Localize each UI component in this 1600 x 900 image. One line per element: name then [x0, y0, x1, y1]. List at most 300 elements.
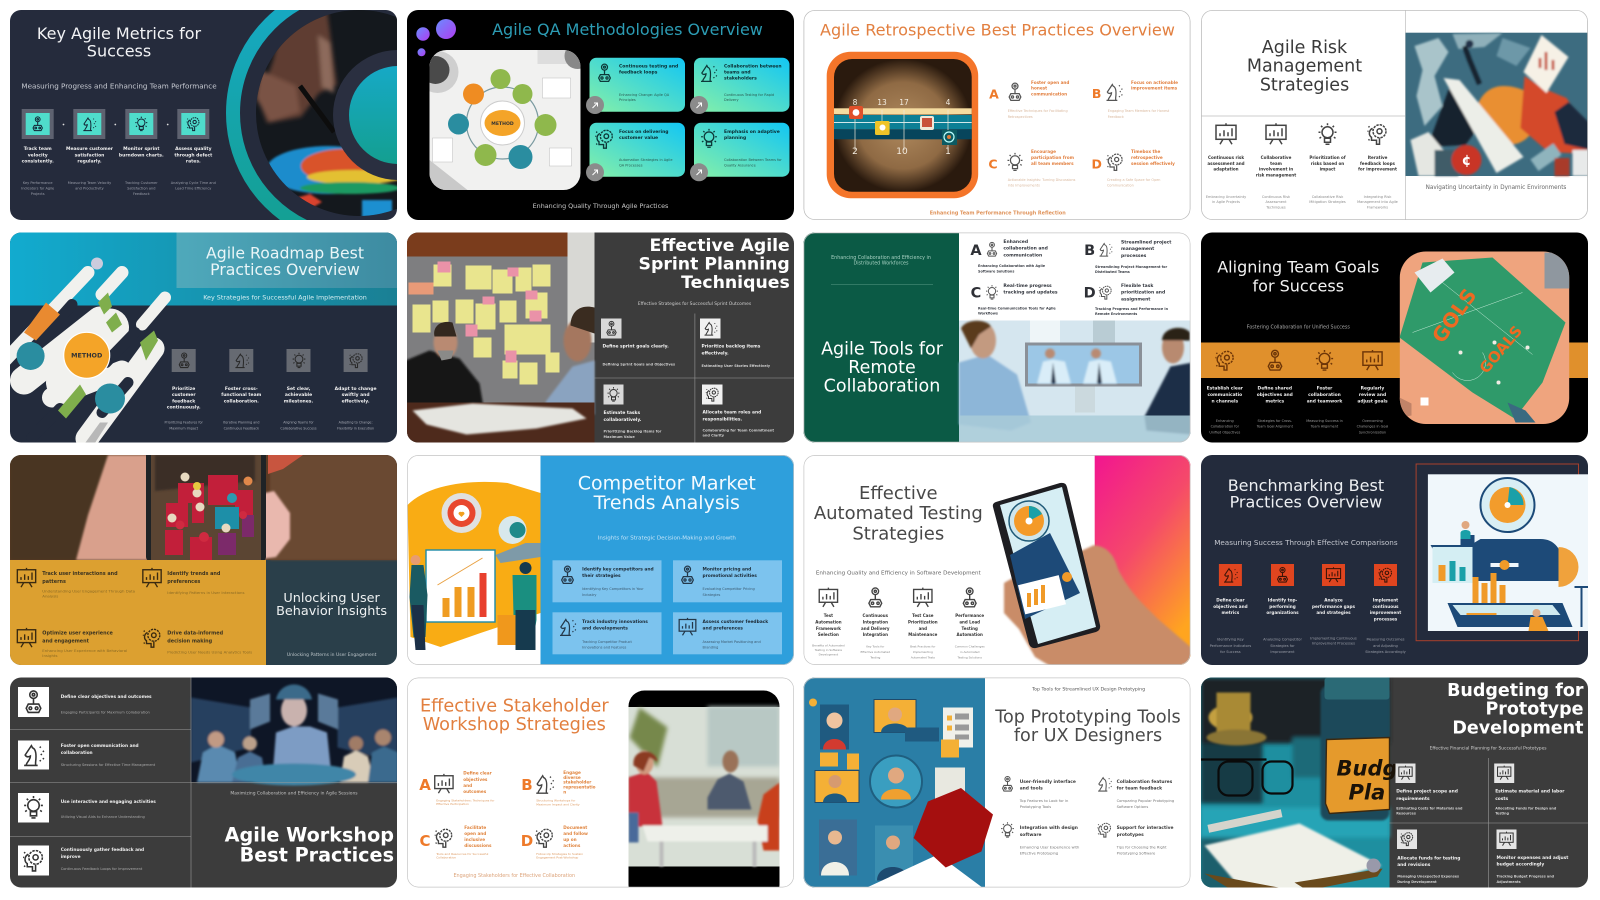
item notes: Maximum Impact and Clarity [536, 802, 580, 806]
title [994, 707, 1181, 746]
title [814, 483, 983, 545]
technique labels: effectively. [702, 350, 729, 356]
tile notes: Identifying Key Competitors in Your [582, 587, 644, 591]
practice notes: Iterative Planning and [223, 421, 259, 425]
item notes: Feedback [1108, 115, 1124, 119]
item notes: Insights [42, 653, 58, 658]
item notes: Workflows [978, 312, 998, 316]
strategy labels: and [919, 626, 927, 631]
item headings: User-friendly interface [1020, 779, 1076, 785]
item headings: processes [1121, 253, 1147, 259]
item headings: and [463, 783, 472, 788]
strategy labels: Selection [818, 632, 839, 637]
item headings: for team feedback [1117, 786, 1162, 792]
technique notes: Prioritizing Backlog Items for [604, 430, 662, 434]
item headings: Facilitate [464, 825, 486, 830]
practice labels: continuously. [167, 405, 201, 411]
budget notes [1396, 806, 1557, 884]
strategy notes: Assessment [1266, 200, 1287, 204]
strategy notes: Integrating Risk [1364, 195, 1392, 199]
practice labels: achievable [285, 392, 312, 398]
item headings: actions [563, 843, 581, 848]
strategy notes: Best Practices for [910, 645, 936, 649]
title: Agile Risk [1262, 38, 1348, 58]
metric labels: velocity [28, 152, 48, 158]
workshop row headings: collaboration [61, 750, 93, 756]
strategy labels: Test Case [912, 613, 934, 618]
goal labels: and teamwork [1307, 398, 1342, 404]
gold panel [10, 560, 266, 668]
panel: Agile QA Methodologies Overview [406, 10, 798, 222]
strategy labels: Maintenance [908, 632, 938, 637]
title [276, 591, 387, 619]
goal notes [1209, 419, 1388, 434]
item letters [970, 243, 1096, 302]
workshop row headings: improve [61, 854, 81, 860]
item notes: Retrospectives [1008, 115, 1033, 119]
strategy notes: Embracing Uncertainty [1206, 195, 1246, 199]
step labels: Define clear [1216, 598, 1246, 602]
item headings: and tools [1020, 786, 1043, 792]
technique labels: Prioritize backlog items [702, 344, 761, 350]
title: Sprint Planning [639, 254, 790, 274]
metric labels: Monitor sprint [123, 146, 160, 152]
tile notes [581, 587, 761, 649]
item notes: Communication [1107, 183, 1134, 187]
technique notes: Defining Sprint Goals and Objectives [602, 362, 675, 366]
strategy notes: Testing Solutions [957, 655, 982, 659]
strategy labels: adaptation [1213, 166, 1239, 172]
image: planning meeting photo [406, 232, 594, 446]
title [1447, 681, 1584, 738]
goal labels: collaboration [1308, 392, 1341, 398]
workshop row notes: Engaging Participants for Maximum Collaboration [61, 711, 150, 715]
strategy notes [1206, 195, 1398, 210]
workshop row headings [61, 694, 156, 860]
strategy notes: Continuous Risk [1262, 195, 1291, 199]
budget labels: Estimate material and labor [1495, 788, 1565, 794]
panel: Competitor Market Trends Analysis [406, 455, 798, 668]
subtitle: Top Tools for Streamlined UX Design Prototyping [1031, 686, 1145, 692]
metric notes: Satisfaction and [127, 186, 155, 190]
item headings: objectives [463, 777, 488, 782]
footer text: Engaging Stakeholders for Effective Collaboration [453, 873, 575, 879]
title: Practices Overview [1230, 492, 1382, 512]
metric notes: Tracking Customer [124, 181, 158, 185]
step notes: and Adjusting [1373, 644, 1398, 648]
title: Success [87, 42, 151, 60]
strategy labels: Integration [863, 620, 888, 624]
image: risk collage [1406, 33, 1592, 176]
title: Workshop Strategies [423, 715, 606, 735]
step labels [1213, 598, 1401, 622]
icon row [1215, 350, 1382, 370]
image: method cycle diagram [430, 50, 580, 190]
tile notes: Assessing Market Positioning and [702, 640, 761, 644]
budget notes: Resources [1396, 812, 1416, 816]
metric labels: burndown charts. [119, 152, 164, 158]
step labels: performing [1269, 604, 1296, 609]
image: timeline in orange frame: 8 [853, 98, 858, 107]
strategy labels: impact [1320, 166, 1335, 172]
item headings: management [1121, 246, 1155, 252]
panel: Budgeting for Prototype Development [1200, 678, 1592, 890]
practice labels: Set clear, [287, 386, 311, 392]
practice labels: customer [172, 392, 196, 398]
title [225, 824, 394, 866]
item notes: Tips for Choosing the Right [1116, 846, 1167, 850]
title [1247, 38, 1362, 95]
strategy labels: involvement in [1259, 166, 1293, 172]
image: goals football field: GOLS [1427, 284, 1481, 347]
budget labels: and revisions [1397, 862, 1431, 868]
strategy labels: risks based on [1311, 161, 1344, 166]
item headings: and engagement [42, 639, 90, 645]
practice labels [167, 386, 377, 411]
strategy labels: team [1270, 161, 1282, 166]
image: timeline in orange frame [827, 52, 978, 198]
title box: Practices Overview [210, 260, 360, 279]
icon row: teal squares [22, 109, 209, 139]
step notes: Strategies for [1270, 644, 1295, 648]
item notes: Top Features to Look for in [1019, 799, 1069, 803]
item letters: D [521, 832, 533, 850]
title [38, 27, 202, 56]
metric labels: Assess quality [175, 146, 212, 152]
step notes: Improvement [1270, 650, 1295, 654]
item headings: Support for interactive [1117, 825, 1174, 831]
item headings: stakeholder [563, 780, 592, 784]
title: Effective Agile [650, 236, 790, 256]
step notes [1210, 636, 1407, 654]
goal labels: Define shared [1258, 385, 1292, 391]
title: for Success [1253, 276, 1344, 296]
image: timeline in orange frame: 10 [896, 147, 908, 157]
strategy labels: Prioritization of [1309, 155, 1346, 160]
title: Effective [859, 483, 938, 504]
panel: Agile Retrospective Best Practices Overview [803, 10, 1195, 222]
card: customer value: Focus on delivering [619, 129, 668, 135]
title: Competitor Market [578, 472, 756, 494]
subtitle: Effective Strategies for Successful Sprint Outcomes [638, 301, 752, 307]
budget labels: requirements [1396, 796, 1430, 802]
item notes [1019, 799, 1174, 856]
item notes: Analysis [42, 594, 58, 598]
step notes: Performance Indicators [1210, 644, 1251, 648]
metric labels: rates. [186, 159, 201, 165]
tile notes: Evaluating Competitor Pricing [702, 587, 755, 591]
tile headings: Track industry innovations [582, 619, 648, 625]
item notes: Comparing Popular Prototyping [1117, 799, 1174, 803]
image: UX designer avatars [803, 678, 993, 890]
step notes: Improvement Processes [1312, 642, 1355, 646]
title: Unlocking User [283, 591, 380, 606]
image: timeline in orange frame: 17 [899, 98, 909, 107]
step labels: Analyze [1324, 598, 1343, 602]
item notes: Effective Participation [436, 802, 469, 806]
title box [176, 232, 398, 288]
strategy notes: Key Tools for [866, 645, 885, 649]
metric labels: Measure customer [66, 146, 114, 152]
step labels: objectives and [1213, 604, 1248, 609]
item headings: Identify trends and [167, 571, 221, 577]
strategy notes: Common Challenges [955, 645, 985, 649]
budget notes: Adjustments [1496, 880, 1521, 884]
strategy labels: Prioritization [908, 620, 938, 624]
item headings: Drive data-informed [167, 631, 224, 637]
goal labels: adjust goals [1357, 398, 1388, 404]
strategy labels: Performance [955, 613, 984, 618]
card: collaboration: teams and [724, 70, 751, 76]
tile notes: Tracking Competitor Product [581, 640, 632, 644]
goal labels: n channels [1211, 398, 1239, 404]
card: customer value [586, 123, 685, 181]
item letters [988, 86, 1102, 172]
tile headings: and developments [582, 626, 628, 632]
step labels: Implement [1373, 598, 1398, 602]
image: hand holding phone [993, 483, 1193, 669]
footer text: Enhancing Quality Through Agile Practices [533, 202, 669, 210]
strategy notes: Frameworks [1367, 206, 1388, 210]
strategy labels: and Delivery [861, 626, 890, 631]
strategy notes: in Agile Projects [1212, 200, 1240, 204]
caption: Navigating Uncertainty in Dynamic Environments [1426, 185, 1566, 191]
item headings: open and [464, 831, 486, 836]
budget labels [1396, 788, 1568, 868]
item headings: prototypes [1117, 832, 1144, 838]
step labels: processes [1374, 616, 1398, 622]
goal notes: Team Alignment [1310, 424, 1339, 428]
strategy labels: Integration [863, 632, 888, 637]
title: Strategies [1260, 75, 1349, 95]
goal labels: Establish clear [1207, 385, 1244, 391]
card: continuous testing [586, 58, 685, 114]
item notes: Software Options [1117, 805, 1148, 809]
item letters: B [1084, 243, 1095, 259]
item headings: discussions [464, 843, 492, 848]
card: collaboration: Collaboration between [724, 64, 782, 70]
title: Effective Stakeholder [420, 696, 609, 716]
item letters: C [971, 286, 981, 302]
item notes: Identifying Patterns in User Interactions [167, 590, 245, 595]
metric labels: Track team [24, 146, 52, 152]
metric labels: satisfaction [75, 152, 104, 158]
item notes [978, 264, 1169, 316]
item notes: Tracking Progress and Performance in [1095, 307, 1169, 311]
item headings: honest [1031, 86, 1047, 90]
item headings: Real-time progress [1003, 283, 1052, 289]
item icons [986, 242, 1112, 299]
subtitle: Unlocking Patterns in User Engagement [287, 652, 377, 658]
image: phone with red figures [10, 451, 402, 561]
practice labels: Adapt to change [335, 386, 377, 392]
goal notes: Unified Objectives [1209, 430, 1240, 434]
strategy notes: Management into Agile [1357, 200, 1398, 204]
step labels: and strategies [1316, 610, 1351, 615]
subtitle: Measuring Success Through Effective Comparisons [1214, 538, 1398, 547]
image: risk collage: ¢ [1462, 153, 1471, 169]
item headings: Flexible task [1121, 283, 1154, 289]
strategy labels: Automation [815, 620, 842, 624]
card: continuous testing: feedback loops [619, 70, 658, 76]
item headings: inclusive [464, 837, 485, 842]
red frame [1416, 464, 1578, 641]
technique labels: Define sprint goals clearly. [602, 344, 669, 350]
title: Strategies [852, 524, 944, 545]
goal notes: Synchronization [1359, 430, 1386, 434]
image: teal ring with hand and colour wheel photo [226, 10, 397, 220]
title: Budgeting for [1447, 681, 1584, 701]
strategy labels: Framework [816, 626, 841, 631]
step labels: improvement [1370, 610, 1401, 615]
goal labels: metrics [1266, 398, 1284, 404]
budget labels: costs [1495, 796, 1509, 802]
analysis tiles [552, 560, 782, 654]
strategy labels [815, 613, 984, 637]
card: continuous testing: Enhancing Change: Agile QA [619, 93, 670, 97]
workshop row headings: Continuously gather feedback and [61, 847, 144, 853]
tile headings: their strategies [582, 573, 621, 579]
practice notes [164, 421, 374, 430]
item notes: Actionable Insights: Turning Discussions [1008, 178, 1076, 182]
title: for UX Designers [1014, 726, 1162, 746]
step labels: metrics [1222, 610, 1240, 615]
green side panel: Remote [848, 358, 916, 378]
gradient block [1095, 455, 1193, 668]
item headings [463, 770, 596, 848]
item headings: decision making [167, 639, 213, 645]
metric labels: regularly. [77, 159, 102, 165]
item notes: Collaboration [436, 856, 456, 860]
item letters [419, 776, 533, 850]
item letters: D [1092, 156, 1102, 172]
card: continuous testing: Continuous testing and [619, 64, 678, 70]
strategy labels: Iterative [1368, 155, 1388, 160]
step notes: for Success [1220, 650, 1241, 654]
image: people at table [628, 690, 780, 890]
practice labels: effectively. [342, 398, 370, 404]
panel: Effective Automated Testing Strategies [803, 455, 1195, 669]
workshop row headings: Define clear objectives and outcomes [61, 694, 152, 700]
item notes [1008, 109, 1170, 187]
item notes: Follow-Up Strategies to Sustain [536, 852, 583, 856]
workshop row notes: Continuous Feedback Loops for Improvement [61, 867, 143, 871]
card: adaptive planning: planning [724, 135, 746, 141]
green side panel: Collaboration [824, 376, 940, 396]
goal notes: Overcoming [1362, 419, 1383, 423]
step notes: Analyzing Competitor [1263, 638, 1302, 642]
title: Automated Testing [814, 503, 983, 524]
item notes: Distributed Teams [1095, 270, 1130, 274]
practice labels: functional team [221, 392, 262, 398]
item letters: A [419, 776, 431, 794]
item notes: Effective Prototyping [1020, 852, 1058, 856]
tile headings: and preferences [702, 626, 743, 632]
card: adaptive planning: Emphasis on adaptive [724, 129, 780, 135]
strategy notes: Development [819, 652, 839, 656]
strategy labels: Test [824, 613, 833, 618]
item notes: into Improvements [1008, 183, 1040, 187]
technique labels: collaboratively. [604, 417, 642, 423]
green side panel [803, 232, 959, 445]
card: collaboration: Continuous Testing for Rapid [724, 93, 774, 97]
metric labels [22, 146, 213, 165]
subtitle: Measuring Progress and Enhancing Team Performance [21, 82, 217, 90]
strategy labels: and Load [959, 620, 980, 624]
tile notes: Strategies [702, 593, 721, 597]
image: futuristic workshop [191, 678, 402, 786]
item notes: Prototyping Software [1117, 852, 1156, 856]
item headings [1003, 239, 1172, 302]
item headings [1020, 779, 1174, 838]
technique notes [602, 362, 774, 439]
step labels: organizations [1266, 610, 1299, 615]
icon boxes [1396, 764, 1516, 849]
budget notes: Managing Unexpected Expenses [1397, 874, 1459, 878]
orange band [1200, 342, 1592, 378]
tile notes: Innovations and Features [582, 645, 626, 649]
item headings: communication [1003, 252, 1042, 258]
panel: Agile Risk Management Strategies [1200, 10, 1592, 222]
title: Development [1452, 718, 1584, 738]
item letters: C [988, 156, 998, 172]
title: Agile QA Methodologies Overview [492, 20, 763, 39]
technique labels: Estimate tasks [604, 410, 640, 416]
title: Management [1247, 57, 1362, 77]
item headings [1031, 80, 1178, 166]
image: method diagram in diagonal stripes: METHOD [71, 352, 102, 360]
panel: Key Agile Metrics for Success [10, 10, 397, 220]
tile headings [582, 566, 768, 632]
item headings: Timebox the [1131, 149, 1161, 154]
icon row [172, 349, 368, 372]
panel: Benchmarking Best Practices Overview [1200, 455, 1592, 668]
goal notes: Challenges in Goal [1357, 424, 1388, 428]
subtitle: Key Strategies for Successful Agile Implementation [203, 294, 367, 302]
technique notes: and Clarity [702, 434, 725, 438]
workshop row headings: Foster open communication and [61, 743, 139, 749]
item headings: Enhanced [1003, 239, 1028, 245]
item headings: patterns [42, 579, 66, 585]
decorative purple dots [416, 19, 456, 56]
subtitle: Enhancing Quality and Efficiency in Software Development [816, 571, 982, 577]
card: customer value: QA Processes [619, 163, 643, 167]
budget notes: Allocating Funds for Design and [1495, 806, 1557, 810]
strategy labels: assessment and [1207, 161, 1245, 166]
practice notes: Prioritizing Features for [165, 421, 204, 425]
item headings: Optimize user experience [42, 631, 114, 637]
image: goals football field [1400, 252, 1574, 424]
goal notes: Measuring Success in [1306, 419, 1343, 423]
image: timeline in orange frame: 13 [877, 98, 887, 107]
item headings: Collaboration features [1117, 779, 1173, 785]
item notes: Enhancing User Experience with Behavioral [42, 648, 127, 653]
item headings: software [1020, 832, 1042, 838]
tile icons [560, 566, 696, 635]
budget notes: Tracking Budget Progress and [1496, 874, 1555, 878]
item headings: representatio [563, 784, 596, 790]
strategy labels: Automation [957, 632, 983, 637]
goal labels: communicatio [1207, 392, 1242, 398]
panel: Agile Roadmap Best Practices Overview [5, 232, 402, 445]
panel: Aligning Team Goals for Success [1200, 232, 1592, 445]
item headings: collaboration and [1003, 246, 1048, 252]
strategy notes: Automated Tests [911, 655, 935, 659]
item headings: n [563, 790, 566, 794]
metric notes: Measuring Team Velocity [68, 181, 111, 185]
strategy notes: Implementing [913, 650, 933, 654]
practice labels: feedback [172, 398, 196, 404]
